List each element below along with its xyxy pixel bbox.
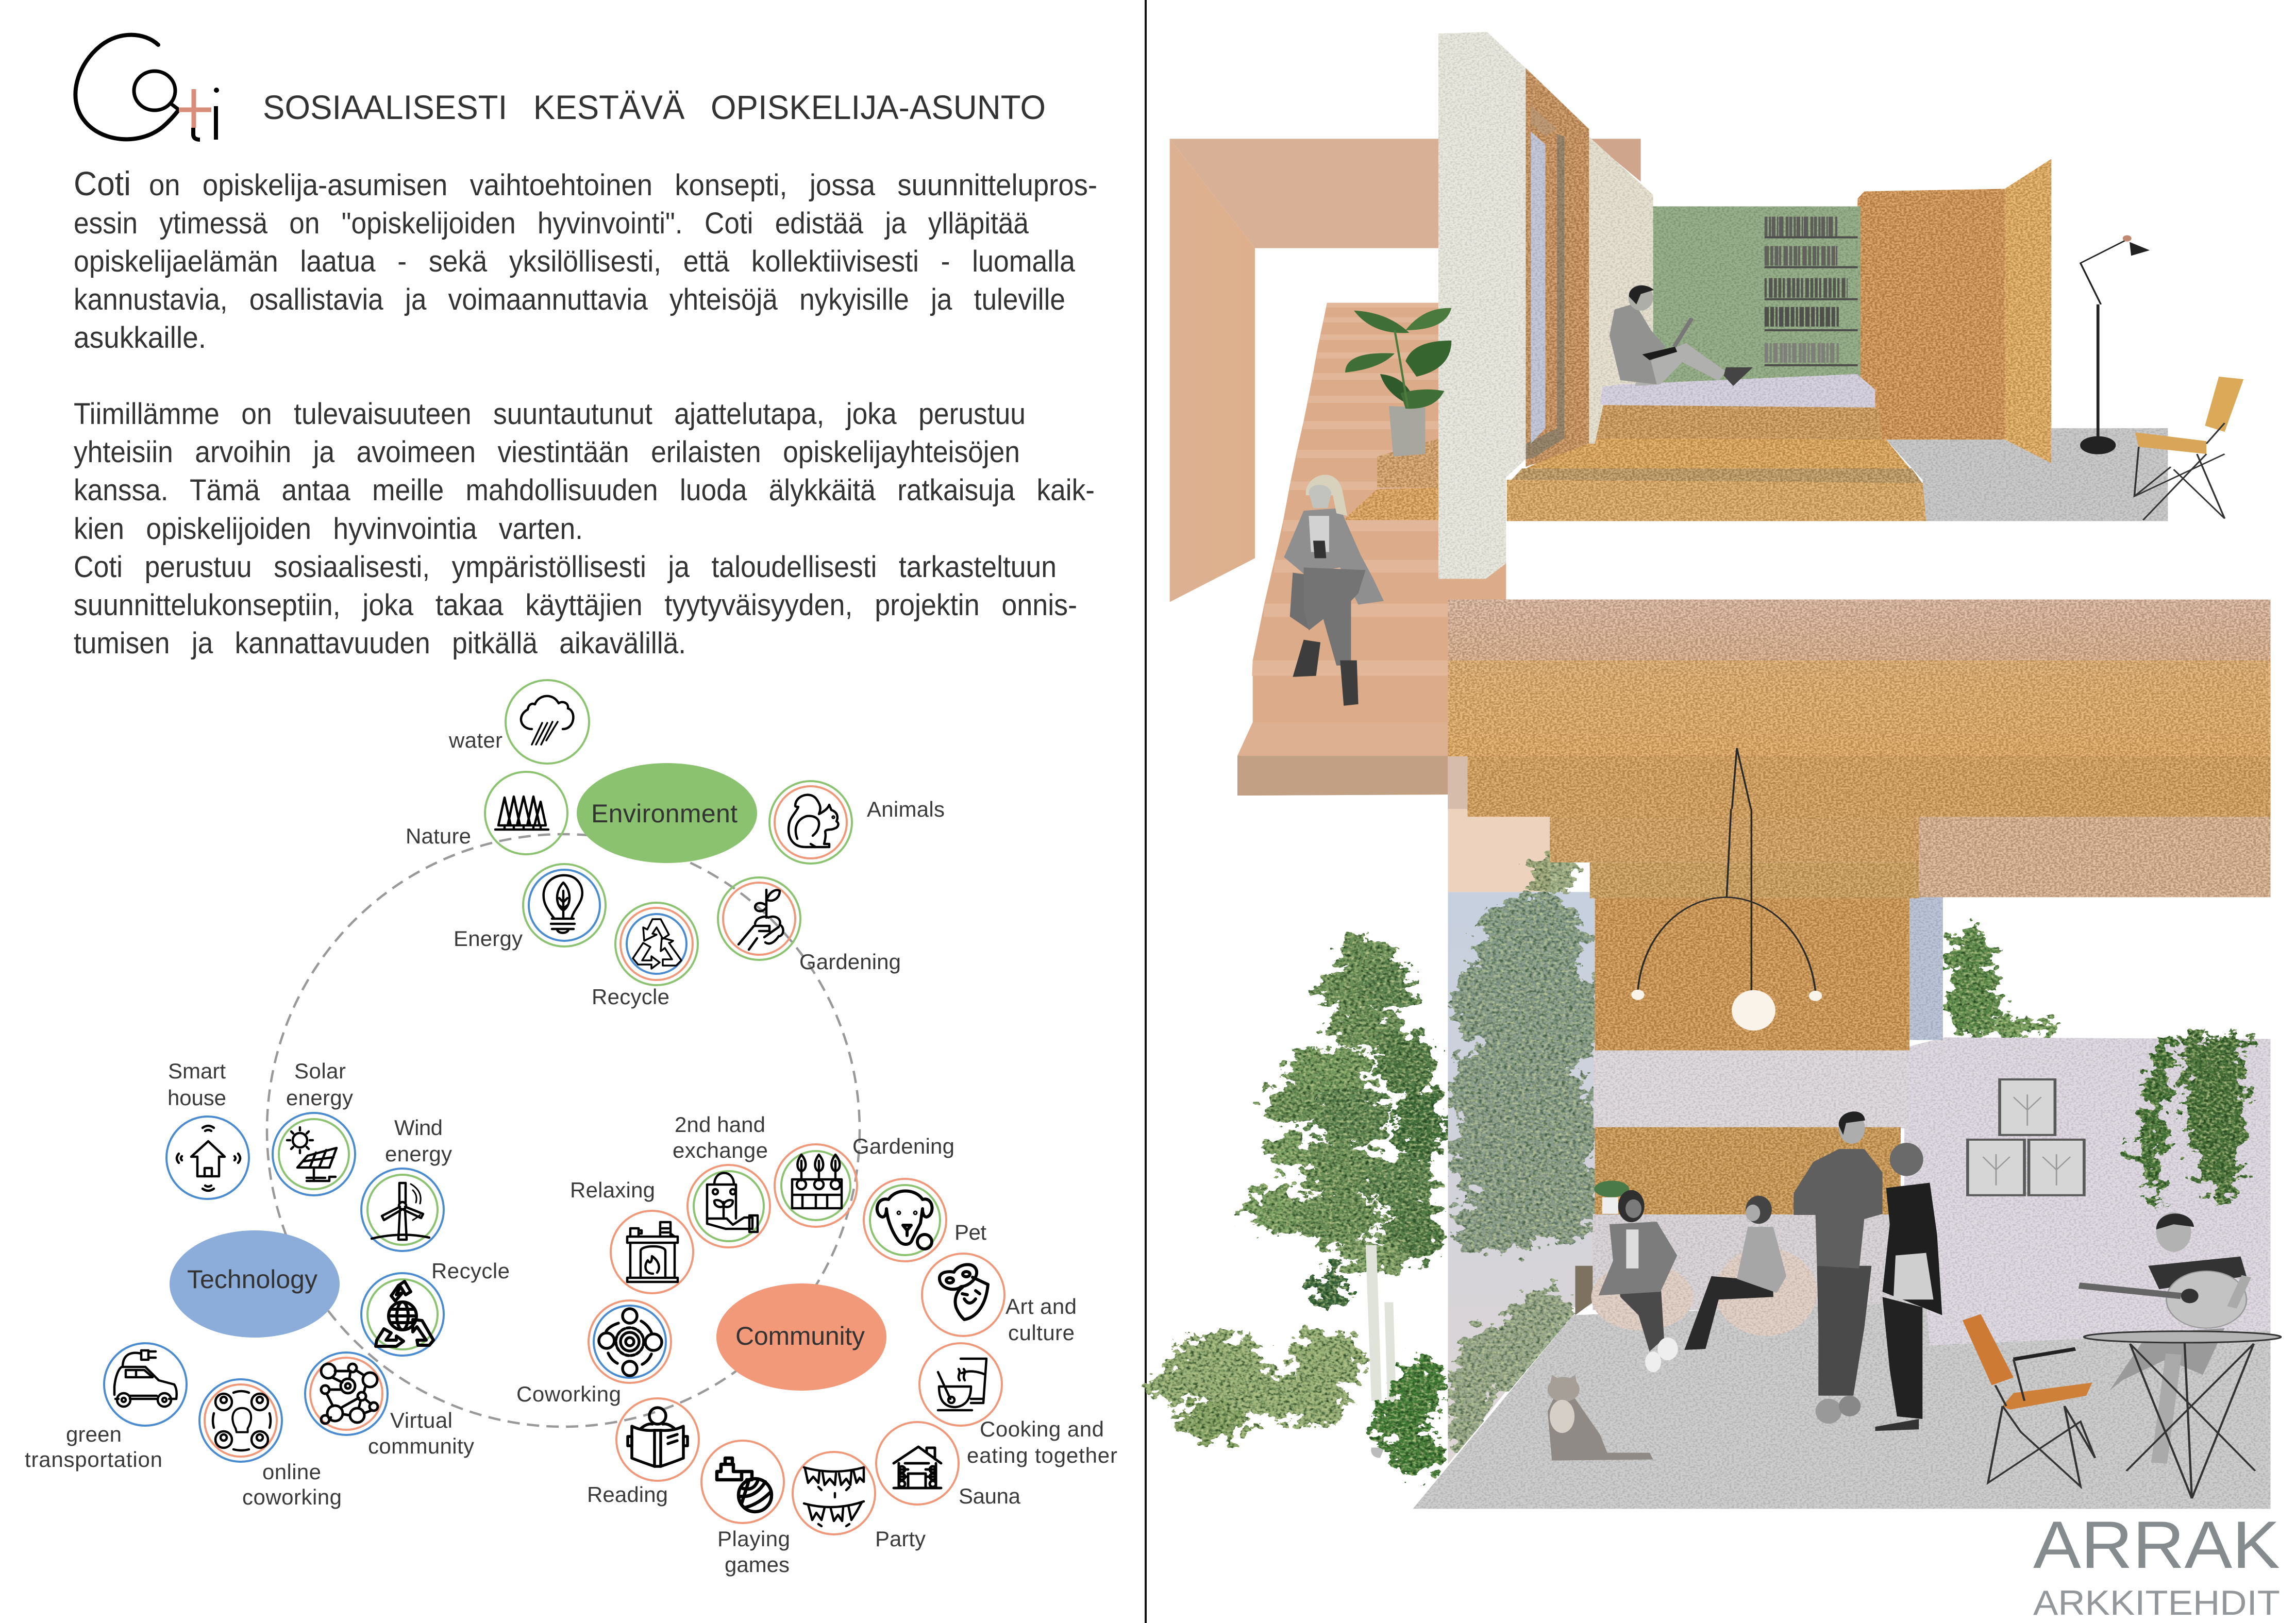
person: seated woman with phone <box>1599 1190 1678 1372</box>
intro text paragraph: on opiskelija-asumisen vaihtoehtoinen konsepti, jossa suunnittelupros- <box>149 168 1097 202</box>
cork beams and wall <box>1467 809 2271 1214</box>
brand: ARKKITEHDIT: ARKKITEHDIT <box>2033 1583 2280 1622</box>
logo: Coti <box>75 35 219 140</box>
node: Recycle (technology) <box>361 1259 510 1356</box>
diagram: dashed connecting circle <box>267 834 860 1427</box>
dark shrub <box>1372 1357 1445 1476</box>
node: Party <box>793 1452 926 1551</box>
intro text paragraph <box>74 164 1097 354</box>
team text paragraph <box>74 397 1095 660</box>
node: Recycle (environment) <box>592 903 698 1009</box>
node: Nature <box>406 772 567 854</box>
intro text paragraph: essin ytimessä on "opiskelijoiden hyvinvointi". Coti edistää ja ylläpitää <box>74 207 1029 240</box>
ceiling beams <box>1448 600 2271 813</box>
node: Solar energy <box>273 1059 355 1195</box>
icon: solar panel <box>287 1127 337 1181</box>
cat <box>1548 1375 1653 1461</box>
node: Coworking <box>516 1300 671 1406</box>
person: seated woman in profile <box>1684 1196 1786 1350</box>
person: standing man <box>1794 1111 1883 1424</box>
label: coworking <box>242 1485 342 1509</box>
node: Cooking and eating together <box>919 1343 1117 1467</box>
icon: log cabin <box>894 1447 941 1488</box>
icon: fireplace <box>627 1222 678 1282</box>
label <box>242 1460 342 1509</box>
node: Animals <box>769 781 945 864</box>
team text paragraph: kien opiskelijoiden hyvinvointia varten. <box>74 512 583 546</box>
icon: people around gear <box>599 1309 662 1376</box>
node: Smart house <box>166 1059 249 1199</box>
panel edge strip <box>1575 1266 1593 1315</box>
team text paragraph: suunnittelukonseptiin, joka takaa käyttäjien tyytyväisyyden, projektin onnis- <box>74 588 1077 622</box>
icon: blocks and ball <box>717 1458 772 1512</box>
icon: bag with sprout in hand <box>707 1173 758 1232</box>
node: online coworking <box>199 1379 342 1509</box>
label: Sauna <box>959 1484 1021 1508</box>
label: house <box>167 1086 226 1110</box>
tree trunks <box>1366 1245 1396 1458</box>
label: energy <box>385 1142 452 1166</box>
node: Gardening (environment) <box>718 877 901 974</box>
icon: person reading book <box>628 1408 688 1466</box>
icon: squirrel <box>789 795 838 847</box>
small plant on ledge <box>1594 1181 1629 1214</box>
scene: lower courtyard <box>1151 809 2281 1509</box>
label: community <box>368 1434 474 1458</box>
team text paragraph: Coti perustuu sosiaalisesti, ympäristöllisesti ja taloudellisesti tarkasteltuun <box>74 550 1057 584</box>
icon: planter box <box>792 1155 842 1208</box>
icon: smart home <box>177 1126 240 1191</box>
label <box>1005 1294 1077 1345</box>
label: Wind <box>394 1115 443 1140</box>
bookshelf <box>1765 227 1858 365</box>
label: Party <box>875 1527 926 1551</box>
team text paragraph: kanssa. Tämä antaa meille mahdollisuuden luoda älykkäitä ratkaisuja kaik- <box>74 474 1095 507</box>
icon: theatre masks <box>940 1264 988 1320</box>
vertical divider line <box>1145 0 1147 1623</box>
team text paragraph: Tiimillämme on tulevaisuuteen suuntautunut ajattelutapa, joka perustuu <box>74 397 1026 431</box>
label: Reading <box>587 1482 668 1507</box>
label: Pet <box>954 1220 986 1244</box>
label <box>717 1527 790 1577</box>
label: Gardening <box>799 950 901 974</box>
title: SOSIAALISESTI KESTÄVÄ OPISKELIJA-ASUNTO <box>263 88 1046 126</box>
hub: Community <box>716 1283 886 1391</box>
icon: wind turbine <box>372 1183 429 1240</box>
intro text paragraph: opiskelijaelämän laatua - sekä yksilöllisesti, että kollektiivisesti - luomalla <box>74 245 1076 278</box>
node: 2nd hand exchange <box>673 1112 770 1247</box>
icon: electric car <box>114 1350 177 1407</box>
label <box>167 1059 226 1110</box>
label: Relaxing <box>570 1178 655 1202</box>
label: Recycle <box>592 985 669 1009</box>
label: Virtual <box>390 1408 453 1432</box>
node: Sauna <box>876 1422 1021 1508</box>
icon: bunting <box>804 1467 864 1526</box>
wall finish: lilac plaster and floor <box>1413 894 2271 1509</box>
label: energy <box>286 1086 353 1110</box>
round table <box>2084 1331 2281 1498</box>
intro text paragraph: kannustavia, osallistavia ja voimaannuttavia yhteisöjä nykyisille ja tuleville <box>74 283 1065 316</box>
node: water <box>448 680 589 764</box>
hub: Environment <box>577 763 757 863</box>
label: Solar <box>294 1059 346 1083</box>
nook: green wall, plaster and concrete <box>1438 32 2168 579</box>
label: online <box>262 1460 321 1484</box>
label: transportation <box>25 1447 162 1472</box>
stair room wall and ceiling <box>1170 139 1641 602</box>
node: green transportation <box>25 1343 187 1472</box>
team text paragraph: tumisen ja kannattavuuden pitkällä aikavälillä. <box>74 627 686 660</box>
node: Gardening (community) <box>775 1134 954 1227</box>
label: water <box>448 728 502 752</box>
orange armchair <box>1963 1314 2095 1486</box>
node: Virtual community <box>305 1352 474 1458</box>
person: standing woman with tote <box>1875 1143 1942 1431</box>
label: Gardening <box>852 1134 954 1158</box>
icon: leaf bulb <box>544 875 582 933</box>
icon: network <box>321 1364 378 1424</box>
node: Pet <box>864 1179 986 1261</box>
intro text paragraph: Coti <box>74 164 131 202</box>
person: guitarist <box>2079 1212 2247 1463</box>
icon: recycling globe <box>376 1281 433 1346</box>
label <box>673 1112 768 1162</box>
trees behind the courtyard <box>1151 928 2057 1442</box>
scene: upper interior with stairs and study nook <box>1170 32 2271 813</box>
icon: people around bulb <box>213 1391 271 1450</box>
label: Nature <box>406 824 471 848</box>
label: Smart <box>168 1059 226 1083</box>
hub: Community: Community <box>735 1322 865 1350</box>
node: Art and culture <box>922 1254 1077 1345</box>
floor lamp <box>2081 235 2149 454</box>
staircase <box>1237 303 1506 810</box>
label <box>385 1115 452 1166</box>
wall picture frames <box>1968 1079 2084 1195</box>
label: exchange <box>673 1138 768 1162</box>
label <box>967 1417 1117 1467</box>
hanging plants <box>2134 1036 2245 1211</box>
node: Playing games <box>701 1441 790 1577</box>
node: Energy <box>454 864 606 951</box>
bean bags <box>1591 1248 1817 1336</box>
label <box>25 1422 162 1472</box>
node: Reading <box>587 1398 699 1507</box>
label: 2nd hand <box>675 1112 765 1137</box>
person: man with laptop <box>1610 285 1753 386</box>
label: Energy <box>454 926 523 951</box>
label: games <box>725 1552 790 1577</box>
label: green <box>66 1422 122 1446</box>
hub: Environment: Environment <box>591 799 738 828</box>
icon: forest <box>495 797 548 830</box>
label: Cooking and <box>980 1417 1104 1441</box>
node: Wind energy <box>361 1115 452 1251</box>
label: Art and <box>1005 1294 1077 1318</box>
cork landing with grain <box>1344 438 1438 520</box>
yellow chair <box>2134 377 2243 520</box>
label: Coworking <box>516 1382 621 1406</box>
label: Recycle <box>431 1259 510 1283</box>
label <box>368 1408 474 1458</box>
icon: plant in hand <box>739 890 783 950</box>
label: Animals <box>867 797 945 821</box>
label: Playing <box>717 1527 790 1551</box>
icon: potted plant <box>1345 308 1451 457</box>
glass panel with tree reflection <box>1446 809 1606 1464</box>
label: eating together <box>967 1443 1117 1467</box>
team text paragraph: yhteisiin arvoihin ja avoimeen viestintään erilaisten opiskelijayhteisöjen <box>74 435 1020 469</box>
nook: cork surfaces <box>1507 68 2051 521</box>
icon: recycle arrows <box>633 919 681 969</box>
icon: dog with ball <box>877 1191 932 1249</box>
node: Relaxing <box>570 1178 693 1293</box>
hub: Technology <box>170 1230 340 1338</box>
pendant lamp wires <box>1732 748 1751 811</box>
icon: rain cloud <box>521 696 573 745</box>
label <box>286 1059 353 1110</box>
brand: ARRAK: ARRAK <box>2033 1507 2280 1582</box>
hub: Technology: Technology <box>187 1265 317 1294</box>
pendant lamp <box>1631 809 1822 1030</box>
icon: bowl and glass <box>938 1359 986 1410</box>
person: woman on stairs <box>1284 475 1384 706</box>
intro text paragraph: asukkaille. <box>74 321 206 354</box>
label: culture <box>1008 1321 1075 1345</box>
